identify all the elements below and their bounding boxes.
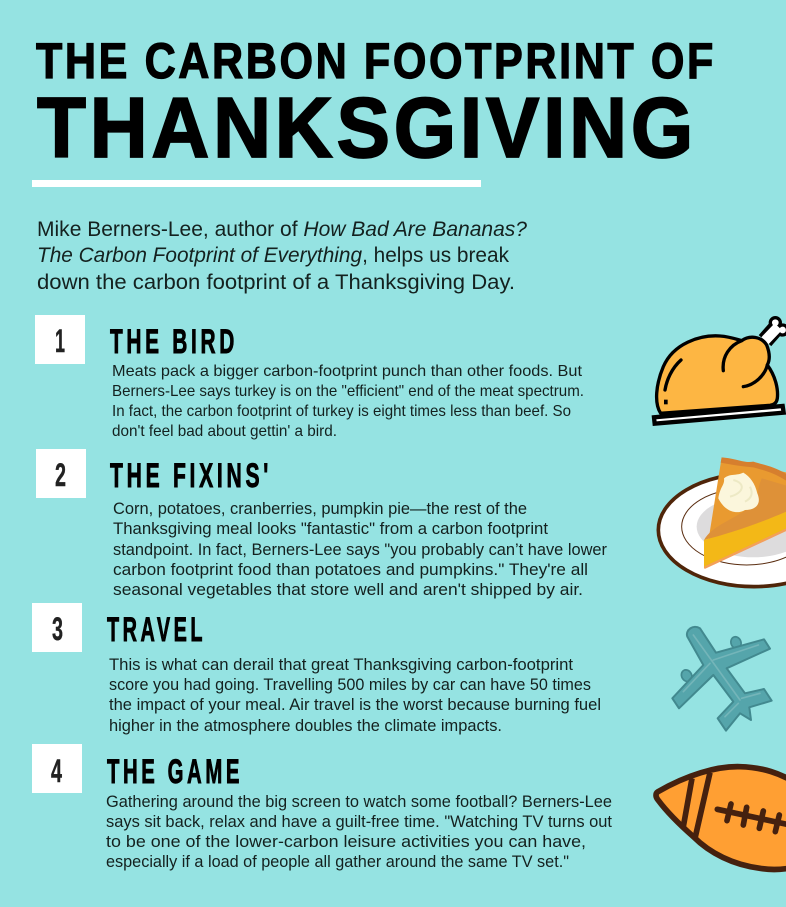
intro text [37,218,527,294]
number badge 1: 1 [55,323,65,359]
body text: the game: says sit back, relax and have a guilt-free time. "Watching TV turns out [106,812,612,831]
number badge 3: 3 [52,611,63,647]
number badge 2: 2 [55,457,66,493]
body text: travel: This is what can derail that great Thanksgiving carbon-footprint [109,655,573,674]
body text: travel: the impact of your meal. Air travel is the worst because burning fuel [109,695,601,714]
heading: the game: THE GAME [107,753,243,791]
panel: the game [32,744,612,871]
title: THANKSGIVING [37,81,697,176]
heading: travel: TRAVEL [107,611,206,649]
body text: travel [109,655,601,735]
body text: the bird: don't feel bad about gettin' a bird. [112,423,337,440]
heading: the bird: THE BIRD [110,323,238,361]
body text: travel: higher in the atmosphere doubles the climate impacts. [109,716,502,735]
body text: the fixins: seasonal vegetables that store well and aren't shipped by air. [113,580,583,599]
body text: the fixins: Corn, potatoes, cranberries, pumpkin pie—the rest of the [113,499,527,518]
body text: the fixins: Thanksgiving meal looks "fantastic" from a carbon footprint [113,519,548,538]
number badge 4 [32,744,82,793]
body text: the game: to be one of the lower-carbon leisure activities you can have, [106,832,586,851]
icon: pumpkin pie on plate [658,457,786,587]
body text: the fixins: carbon footprint food than potatoes and pumpkins." They're all [113,560,588,579]
icon: football [656,767,786,869]
number badge 2 [36,449,86,498]
intro text: Mike Berners-Lee, author of How Bad Are Bananas? [37,218,527,241]
title [36,33,716,176]
number badge 1 [35,315,85,364]
number badge 4: 4 [51,753,62,789]
body text: the fixins: standpoint. In fact, Berners-Lee says "you probably can’t have lower [113,540,607,559]
body text: the game [106,792,612,871]
heading: the fixins: THE FIXINS' [110,457,272,495]
title underline [32,180,481,187]
panel: the bird [35,315,584,440]
body text: the game: especially if a load of people all gather around the same TV set." [106,852,569,871]
body text: the bird: In fact, the carbon footprint of turkey is eight times less than beef. So [112,403,571,420]
body text: the bird: Meats pack a bigger carbon-footprint punch than other foods. But [112,363,583,380]
number badge 3 [32,603,82,652]
icon: airplane [672,627,772,731]
body text: the fixins [113,499,607,599]
body text: travel: score you had going. Travelling 500 miles by car can have 50 times [109,675,591,694]
body text: the game: Gathering around the big screen to watch some football? Berners-Lee [106,792,612,811]
intro text: The Carbon Footprint of Everything, helps us break [37,244,509,267]
panel: the fixins [36,449,607,599]
body text: the bird: Berners-Lee says turkey is on the "efficient" end of the meat spectrum. [112,383,584,400]
panel: travel [32,603,601,735]
icon: roast turkey [654,318,786,424]
intro text: down the carbon footprint of a Thanksgiving Day. [37,271,515,294]
body text: the bird [112,363,584,440]
